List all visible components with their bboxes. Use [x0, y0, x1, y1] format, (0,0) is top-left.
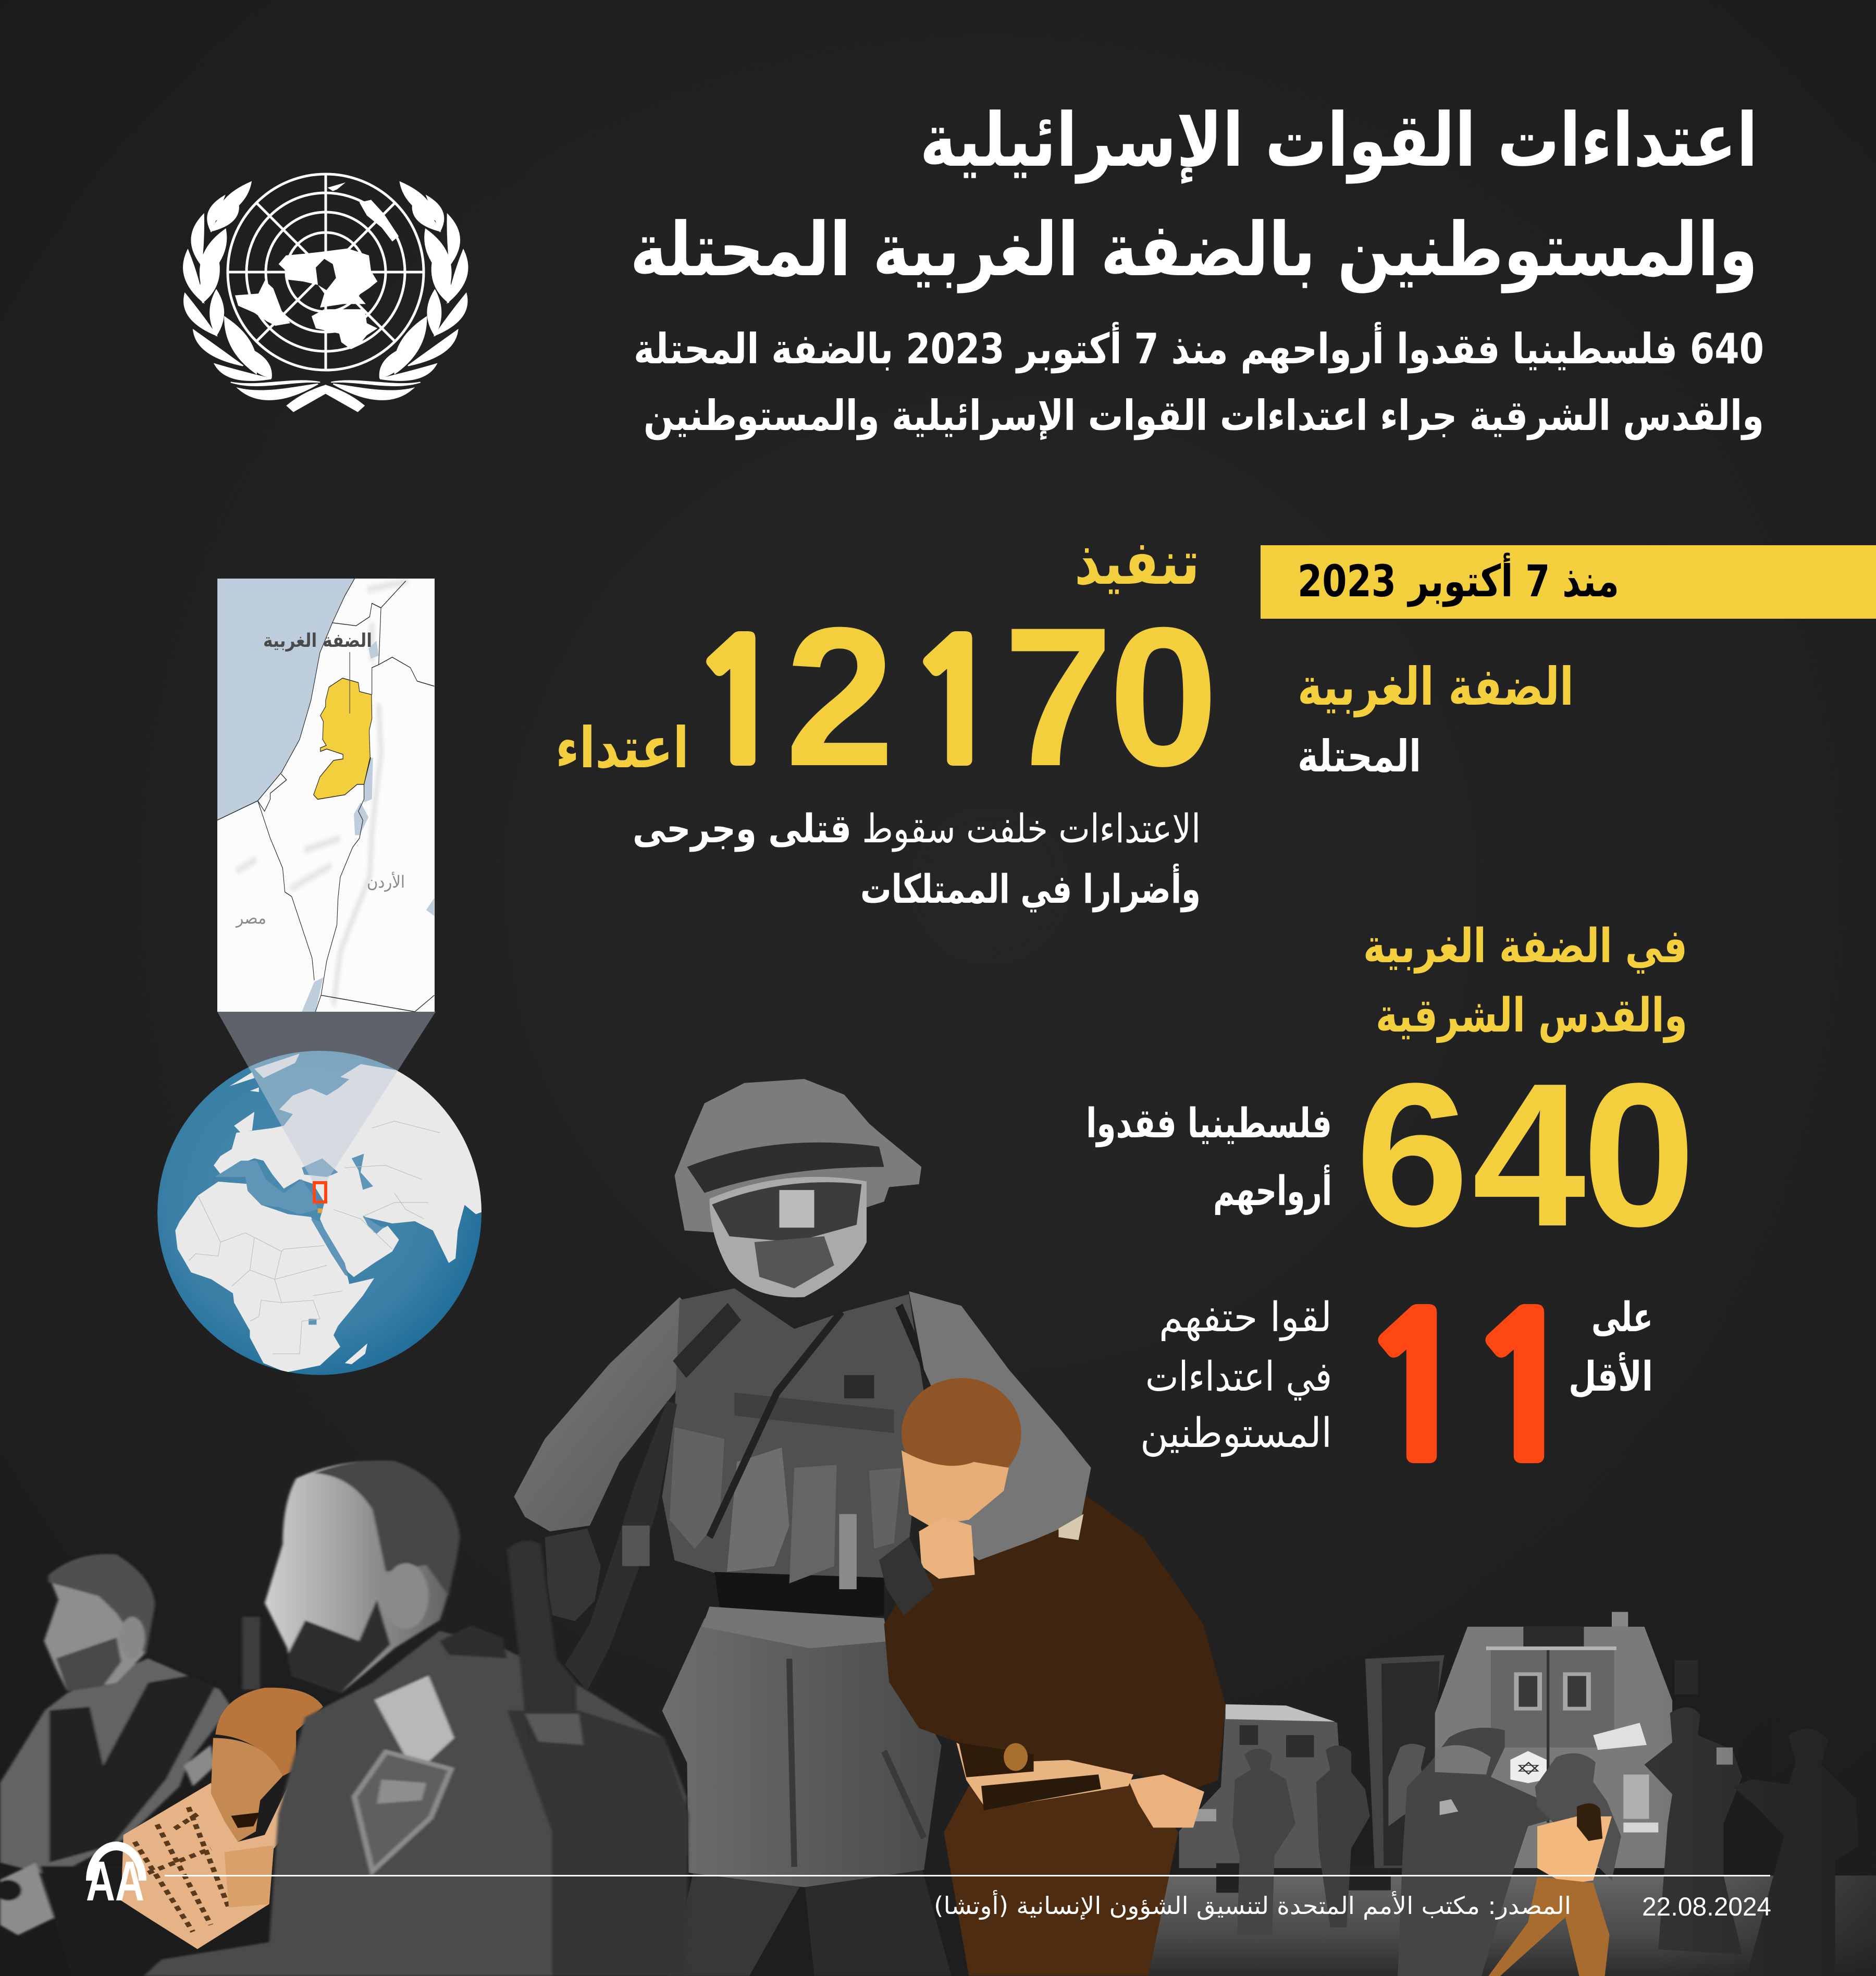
- stat: 12170 attacks: اعتداء: [556, 716, 689, 781]
- soldier figure: [514, 1288, 952, 1975]
- water: [302, 641, 434, 1012]
- map labels: مصر: [235, 908, 266, 928]
- stat: 640 killed: 640: [1355, 1041, 1696, 1269]
- stat: 11 killed by settlers: [1140, 1293, 1653, 1488]
- title: [630, 97, 1758, 293]
- West Bank territory: [314, 678, 372, 799]
- soldiers on the left: [1232, 1749, 1295, 1935]
- stat: 12170 attacks: 70: [1003, 586, 1218, 807]
- stat: 11 killed by settlers: في اعتداءات: [1145, 1354, 1332, 1401]
- subtitle: 640 فلسطينيا فقدوا أرواحهم منذ 7 أكتوبر 2023 بالضفة المحتلة: [634, 322, 1764, 374]
- stat: 11 killed by settlers: الأقل: [1569, 1353, 1653, 1401]
- stat: 12170 attacks: [556, 526, 1218, 807]
- stat: 12170 attacks: تنفيذ: [1075, 526, 1200, 598]
- stat: 11 killed by settlers: على: [1591, 1294, 1653, 1341]
- AA logo: [86, 1842, 146, 1912]
- land masses: [175, 1054, 482, 1372]
- photo: vehicles and soldiers detaining a boy: ✡: [1515, 1759, 1542, 1778]
- stat: 640 killed: فلسطينيا فقدوا: [1086, 1100, 1332, 1147]
- terrain shading: [236, 581, 408, 1006]
- photo: soldier in the back, left: [0, 1554, 269, 1976]
- stat: 11 killed by settlers: 11: [1357, 1293, 1584, 1488]
- borders: [258, 581, 434, 1012]
- stat description: الاعتداءات خلفت سقوط قتلى وجرحى: [633, 805, 1201, 852]
- stat: 12170 attacks: 2: [785, 586, 895, 807]
- date: 22.08.2024: [1642, 1892, 1771, 1921]
- region heading: [1298, 656, 1574, 782]
- stat description: وأضرارا في الممتلكات: [860, 863, 1201, 913]
- funnel from globe to map: [217, 1012, 436, 1181]
- stat: 11 killed by settlers: لقوا حتفهم: [1159, 1294, 1332, 1342]
- photo: vehicles and soldiers detaining a boy: [1146, 1590, 1876, 1976]
- stat: 12170 attacks: 1: [688, 621, 790, 787]
- map labels: الأردن: [367, 872, 405, 892]
- borders: [189, 1121, 440, 1354]
- heading: West Bank and East Jerusalem: والقدس الشرقية: [1376, 988, 1687, 1044]
- world map and wreath: [183, 182, 467, 411]
- banner: date range: [1261, 545, 1876, 619]
- AA logo: AA: [86, 1849, 144, 1912]
- globe: [157, 1051, 482, 1375]
- map panel: West Bank: [217, 578, 435, 1012]
- footer rule: [165, 1875, 1770, 1876]
- source note: المصدر: مكتب الأمم المتحدة لتنسيق الشؤون الإنسانية (أوتشا): [934, 1890, 1571, 1920]
- soldier arm around the boy: [909, 1291, 1091, 1561]
- locator box: [314, 1183, 326, 1202]
- heading: West Bank and East Jerusalem: [1363, 919, 1687, 1044]
- icon: UN emblem: [183, 174, 467, 411]
- region heading: المحتلة: [1298, 731, 1421, 782]
- map labels: [235, 630, 405, 928]
- inland seas: [215, 1153, 386, 1324]
- stat: 640 killed: أرواحهم: [1213, 1164, 1332, 1215]
- stat description: [633, 805, 1201, 913]
- banner: date range: منذ 7 أكتوبر 2023: [1298, 553, 1619, 607]
- stat: 640 killed: [1086, 1041, 1696, 1269]
- photo: Israeli soldier holding a boy: [514, 1079, 1226, 1975]
- photo: soldier in the foreground, left: [144, 1460, 689, 1976]
- leader line: [349, 652, 351, 714]
- detained boy: [1537, 1817, 1612, 1884]
- soldiers in the middle: [1398, 1728, 1579, 1976]
- sea: [217, 578, 355, 820]
- heading: West Bank and East Jerusalem: في الضفة الغربية: [1363, 919, 1687, 974]
- region heading: الضفة الغربية: [1298, 656, 1574, 718]
- soldier helmet and visor: [675, 1079, 921, 1297]
- subtitle: [634, 322, 1764, 440]
- photographer and soldier on the right: [1645, 1708, 1742, 1954]
- map labels: الضفة الغربية: [263, 630, 372, 652]
- globe grid: [228, 174, 424, 370]
- highlighted West Bank: [318, 1208, 322, 1213]
- stat: 11 killed by settlers: المستوطنين: [1140, 1410, 1332, 1457]
- stat: 12170 attacks: 1: [905, 621, 1007, 787]
- photo: woman with keffiyeh: [121, 1688, 323, 1949]
- boy: [879, 1291, 1226, 1975]
